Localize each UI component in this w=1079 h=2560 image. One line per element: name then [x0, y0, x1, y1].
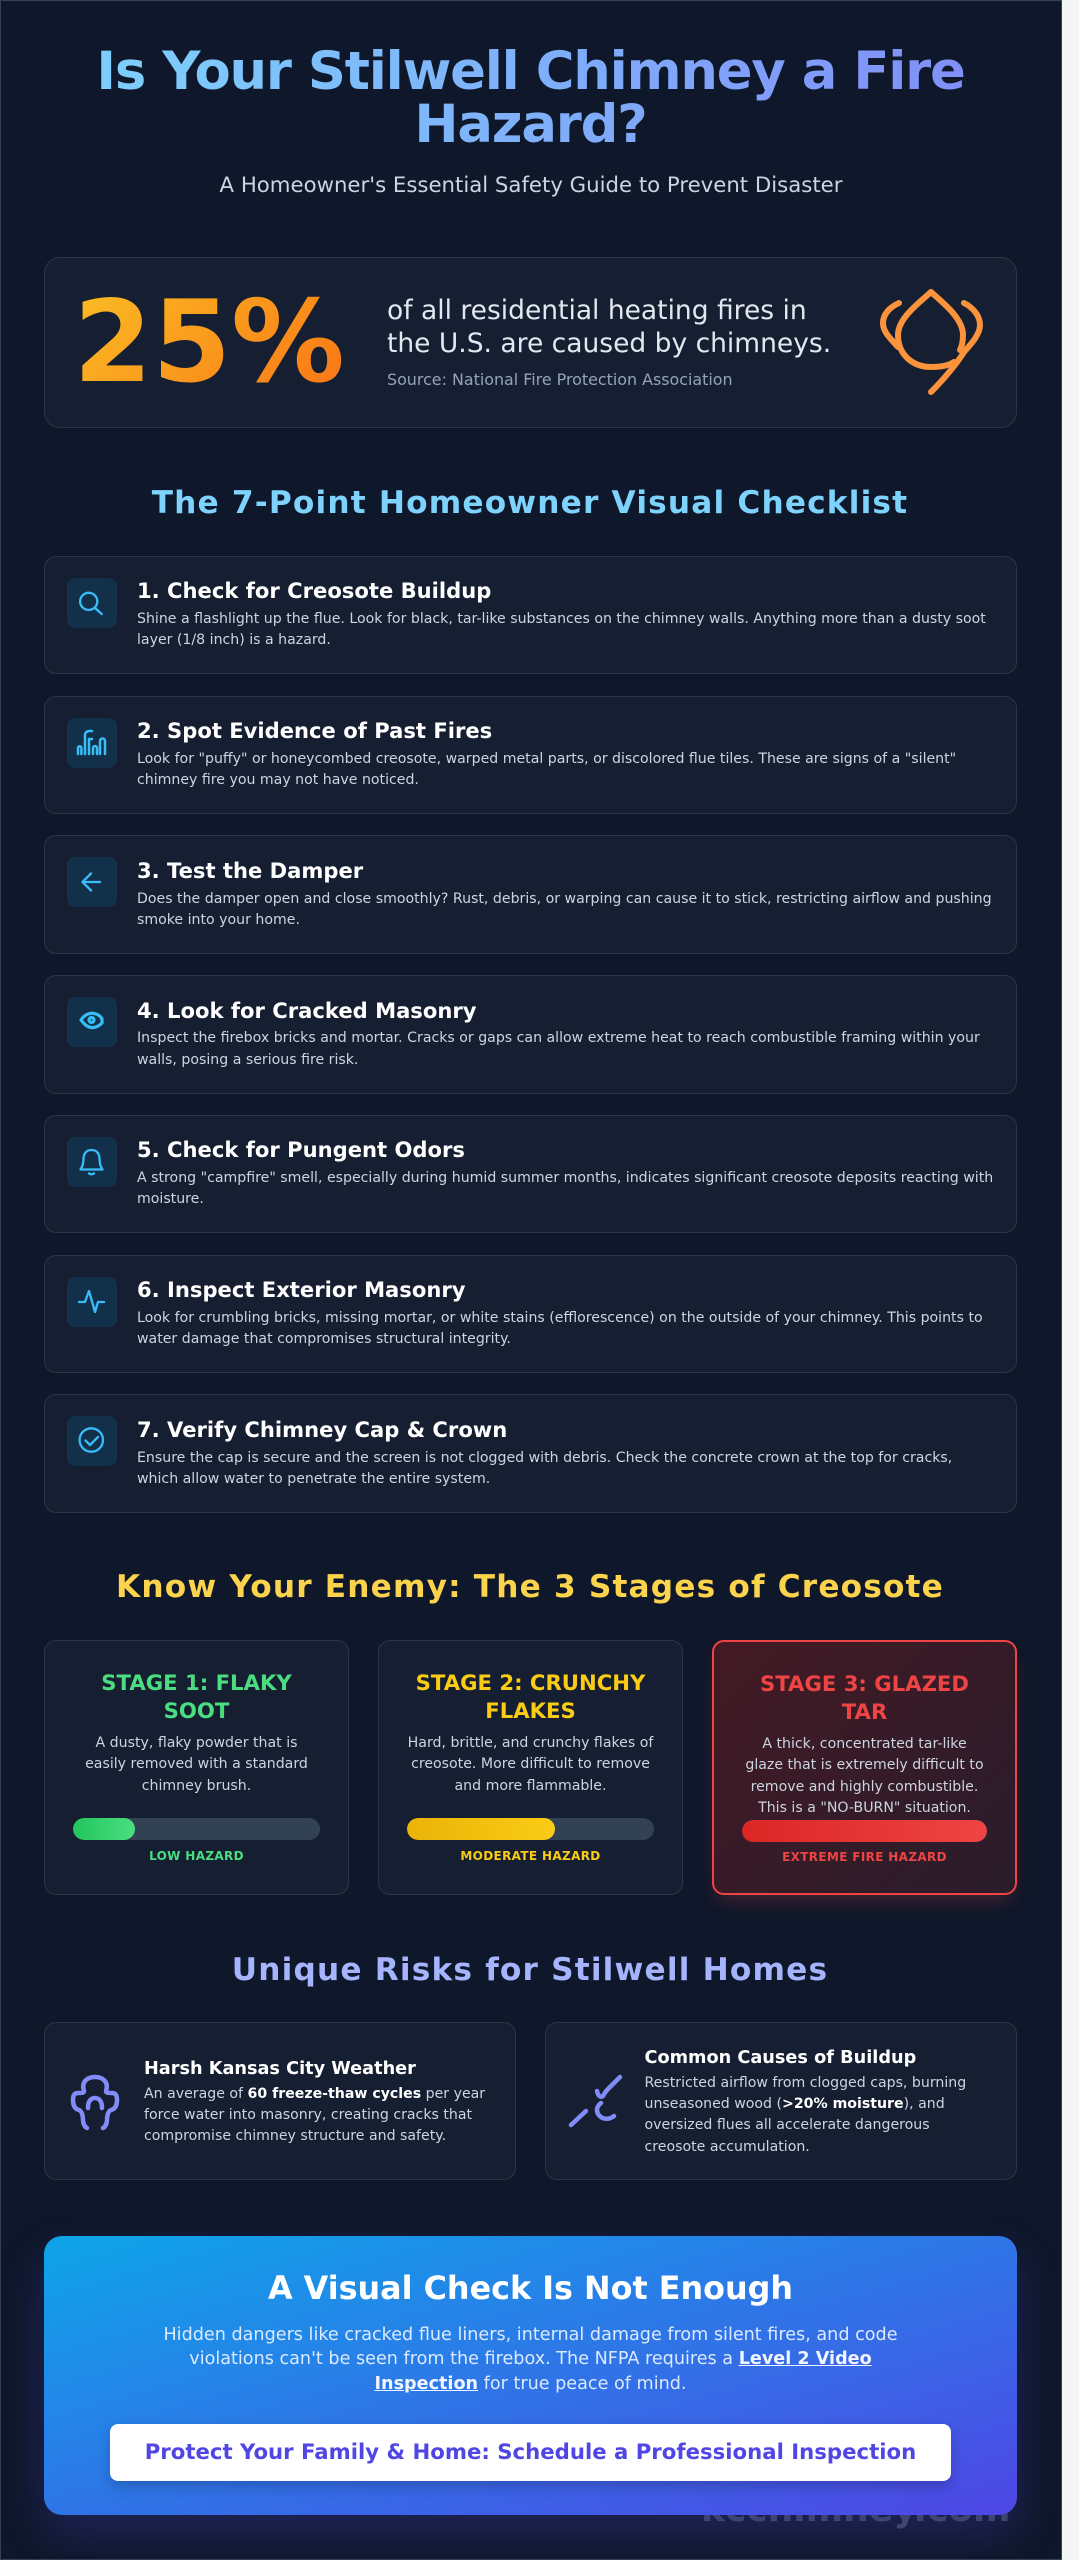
risk description: force water into masonry, creating cracks that	[144, 2107, 472, 2123]
panel: checklist item 4	[44, 975, 1017, 1094]
item description: Ensure the cap is secure and the screen is not clogged with debris. Check the concrete crown at the top for cracks,	[137, 1450, 952, 1466]
panel: checklist item 2	[44, 696, 1017, 814]
stage description: A dusty, flaky powder that is	[96, 1735, 297, 1751]
panel: stage 1	[44, 1640, 349, 1895]
stage title: STAGE 3: GLAZED	[760, 1671, 969, 1696]
statistic text	[387, 295, 831, 359]
risk description	[144, 2086, 486, 2144]
item description: A strong "campfire" smell, especially during humid summer months, indicates significant creosote deposits reacting with	[137, 1170, 993, 1186]
item description	[137, 1310, 983, 1347]
panel: Kansas City weather	[44, 2022, 516, 2180]
stage title: TAR	[842, 1699, 887, 1724]
item description	[137, 1030, 980, 1068]
risk description: creosote accumulation.	[644, 2139, 810, 2155]
panel: stage 3	[712, 1640, 1017, 1895]
item description: moisture.	[137, 1191, 204, 1207]
hazard bar: low	[73, 1818, 320, 1840]
icon: eye	[67, 997, 117, 1047]
stage description	[408, 1735, 654, 1794]
panel: checklist item 6	[44, 1254, 1017, 1373]
panel: call to action	[44, 2236, 1017, 2515]
hazard bar: extreme	[742, 1820, 987, 1842]
stage description: Hard, brittle, and crunchy flakes of	[408, 1735, 653, 1751]
watermark: kcchimney.com	[701, 2489, 1011, 2530]
risk description: oversized flues all accelerate dangerous	[644, 2117, 930, 2133]
hazard bar: moderate	[407, 1818, 654, 1840]
panel: checklist item 5	[44, 1115, 1017, 1233]
panel: stage 2	[378, 1640, 683, 1895]
panel: causes of buildup	[545, 2022, 1017, 2180]
heading: unique risks: Unique Risks for Stilwell Homes	[232, 1952, 828, 1988]
icon: bars	[67, 718, 117, 768]
stage description: A thick, concentrated tar-like	[762, 1736, 967, 1752]
icon: weather	[70, 2074, 120, 2130]
CTA body text	[163, 2325, 898, 2394]
icon: pulse	[67, 1276, 117, 1326]
item description: walls, posing a serious fire risk.	[137, 1052, 358, 1068]
CTA body text: Hidden dangers like cracked flue liners, internal damage from silent fires, and code	[163, 2325, 898, 2345]
risk description: unseasoned wood (>20% moisture), and	[644, 2096, 945, 2112]
item description: water damage that compromises structural integrity.	[137, 1331, 511, 1347]
hazard label: MODERATE HAZARD	[460, 1849, 601, 1863]
stage description: This is a "NO-BURN" situation.	[758, 1800, 971, 1816]
stage title: SOOT	[164, 1698, 229, 1723]
CTA body text: Inspection for true peace of mind.	[374, 2374, 686, 2394]
item description	[137, 1450, 952, 1487]
stage description	[745, 1736, 984, 1816]
item description: chimney fire you may not have noticed.	[137, 772, 419, 788]
risk title: Common Causes of Buildup	[644, 2048, 916, 2068]
icon: check circle	[67, 1416, 117, 1466]
item description	[137, 1170, 993, 1207]
panel: checklist item 7	[44, 1394, 1017, 1513]
item description: Inspect the firebox bricks and mortar. Cracks or gaps can allow extreme heat to reach combustible framing within your	[137, 1030, 980, 1046]
item description	[137, 891, 992, 928]
item title: 1. Check for Creosote Buildup	[137, 578, 491, 603]
icon: left arrow	[67, 857, 117, 907]
icon: broken link	[568, 2074, 622, 2128]
hazard label: EXTREME FIRE HAZARD	[782, 1850, 947, 1864]
CTA button: Protect Your Family & Home: Schedule a Professional Inspection	[145, 2440, 916, 2465]
risk title: Harsh Kansas City Weather	[144, 2058, 416, 2078]
item description: Look for "puffy" or honeycombed creosote, warped metal parts, or discolored flue tiles. These are signs of a "silent"	[137, 751, 956, 767]
icon: bell	[67, 1137, 117, 1187]
panel: checklist item 3	[44, 835, 1017, 954]
stage description: remove and highly combustible.	[751, 1779, 978, 1795]
risk description: Restricted airflow from clogged caps, burning	[644, 2075, 966, 2091]
item title: 4. Look for Cracked Masonry	[137, 998, 477, 1023]
risk description: An average of 60 freeze-thaw cycles per year	[144, 2086, 485, 2102]
item description: Shine a flashlight up the flue. Look for black, tar-like substances on the chimney walls. Anything more than a dusty soot	[137, 611, 986, 627]
stage title	[416, 1670, 646, 1723]
icon: flame	[880, 289, 983, 395]
title: Hazard?	[414, 94, 647, 155]
stage title: STAGE 2: CRUNCHY	[416, 1670, 645, 1695]
stage description: creosote. More difficult to remove	[411, 1756, 650, 1772]
CTA button	[110, 2424, 951, 2481]
stage description: and more flammable.	[455, 1778, 606, 1794]
item description	[137, 611, 986, 648]
CTA heading: A Visual Check Is Not Enough	[268, 2270, 793, 2307]
risk description	[644, 2075, 966, 2155]
item title: 3. Test the Damper	[137, 858, 363, 883]
stage title	[760, 1671, 969, 1724]
item title: 7. Verify Chimney Cap & Crown	[137, 1417, 507, 1442]
stage description	[85, 1735, 308, 1794]
stage description: easily removed with a standard	[85, 1756, 308, 1772]
item title: 2. Spot Evidence of Past Fires	[137, 718, 492, 743]
item description: layer (1/8 inch) is a hazard.	[137, 632, 331, 648]
item description: which allow water to penetrate the entire system.	[137, 1471, 490, 1487]
statistic text: the U.S. are caused by chimneys.	[387, 328, 831, 359]
subtitle: A Homeowner's Essential Safety Guide to Prevent Disaster	[220, 173, 842, 198]
item description: smoke into your home.	[137, 912, 300, 928]
risk description: compromise chimney structure and safety.	[144, 2128, 446, 2144]
statistic text: of all residential heating fires in	[387, 295, 807, 326]
source: Source: National Fire Protection Association	[387, 370, 733, 388]
item description: Look for crumbling bricks, missing mortar, or white stains (efflorescence) on the outside of your chimney. This points to	[137, 1310, 983, 1326]
item title: 5. Check for Pungent Odors	[137, 1137, 465, 1162]
big number 25%: 25%	[73, 276, 345, 408]
item description	[137, 751, 956, 788]
item title: 6. Inspect Exterior Masonry	[137, 1277, 466, 1302]
hazard label: LOW HAZARD	[149, 1849, 244, 1863]
stage description: glaze that is extremely difficult to	[745, 1757, 984, 1773]
title: Is Your Stilwell Chimney a Fire	[96, 41, 965, 102]
heading: creosote stages: Know Your Enemy: The 3 Stages of Creosote	[116, 1569, 944, 1605]
stage title: STAGE 1: FLAKY	[101, 1670, 292, 1695]
title	[44, 45, 1017, 152]
CTA body text: violations can't be seen from the firebox. The NFPA requires a Level 2 Video	[189, 2349, 872, 2369]
item description: Does the damper open and close smoothly? Rust, debris, or warping can cause it to stick, restricting airflow and pushing	[137, 891, 992, 907]
stage description: chimney brush.	[142, 1778, 251, 1794]
panel: checklist item 1	[44, 556, 1017, 674]
icon: magnifier	[67, 578, 117, 628]
panel: key statistic	[44, 257, 1017, 428]
stage title: FLAKES	[485, 1698, 576, 1723]
stage title	[101, 1670, 292, 1723]
heading: checklist: The 7-Point Homeowner Visual Checklist	[152, 485, 908, 521]
